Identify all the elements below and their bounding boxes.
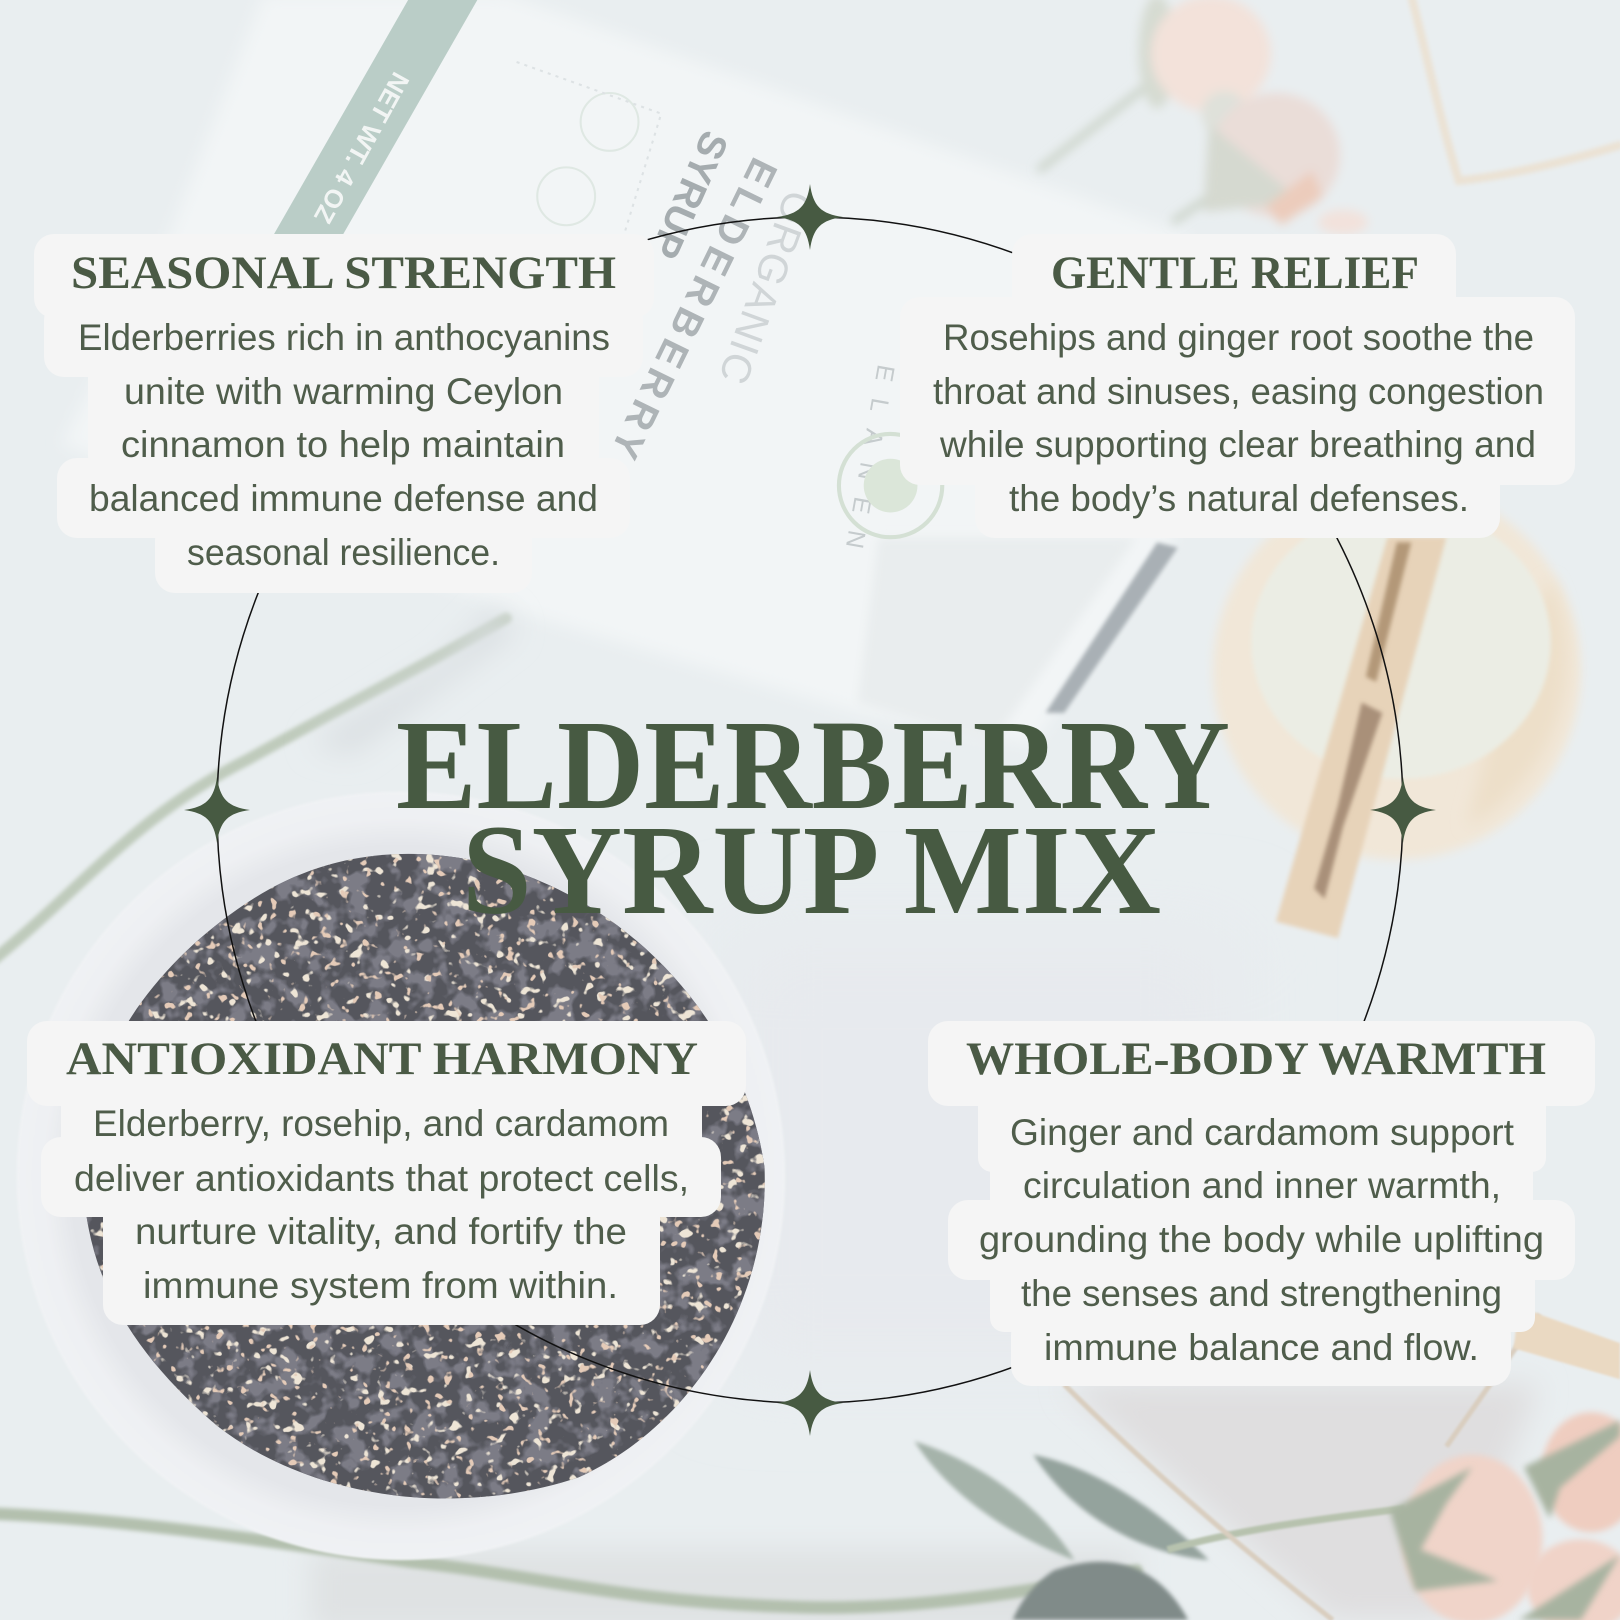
text: whole-body warmth body: immune balance and flow. — [1044, 1327, 1479, 1368]
gold cup and liquid — [1213, 484, 1581, 860]
panel: gentle relief — [900, 234, 1575, 538]
text: gentle relief body: throat and sinuses, easing congestion — [933, 371, 1544, 412]
text: gentle relief body: while supporting clear breathing and — [939, 424, 1536, 465]
star: right — [1370, 777, 1436, 843]
bag — [62, 0, 1188, 754]
connecting circle — [217, 217, 1403, 1403]
main title: ELDERBERRY — [396, 694, 1230, 836]
text: gentle relief body: the body’s natural defenses. — [1009, 478, 1469, 519]
bottom leaves and roses — [914, 1307, 1620, 1620]
panel: whole-body warmth — [928, 1021, 1595, 1386]
text: seasonal strength body: Elderberries rich in anthocyanins — [78, 317, 610, 358]
cinnamon stick — [1276, 537, 1446, 938]
star: bottom — [777, 1370, 843, 1436]
text: seasonal strength body: unite with warming Ceylon — [124, 371, 563, 412]
bag: ELDERBERRY — [602, 151, 786, 466]
text: whole-body warmth body — [979, 1112, 1544, 1368]
top frame gold line — [1411, 0, 1620, 181]
text: seasonal strength body: seasonal resilience. — [187, 532, 500, 573]
main title: SYRUP MIX — [462, 799, 1161, 941]
bag: ELANEN — [840, 363, 899, 550]
star: left — [184, 777, 250, 843]
main title — [396, 694, 1230, 941]
text: seasonal strength body: cinnamon to help maintain — [121, 424, 565, 465]
heading: gentle relief: GENTLE RELIEF — [1051, 247, 1419, 299]
top roses — [1038, 0, 1368, 235]
text: antioxidant harmony body: Elderberry, rosehip, and cardamom — [93, 1103, 669, 1144]
panel: seasonal strength — [34, 234, 654, 593]
bag: ORGANIC — [710, 185, 822, 390]
bag: SYRUP — [642, 124, 737, 265]
text: antioxidant harmony body: deliver antioxidants that protect cells, — [74, 1158, 689, 1199]
text: whole-body warmth body: grounding the body while uplifting — [979, 1219, 1544, 1260]
text: whole-body warmth body: circulation and inner warmth, — [1023, 1165, 1501, 1206]
text: seasonal strength body — [78, 317, 610, 573]
heading: whole-body warmth: WHOLE-BODY WARMTH — [966, 1033, 1546, 1085]
text: antioxidant harmony body: nurture vitality, and fortify the — [135, 1211, 627, 1252]
heading: seasonal strength: SEASONAL STRENGTH — [71, 247, 616, 299]
stems left — [0, 618, 1136, 1608]
text: whole-body warmth body: the senses and strengthening — [1021, 1273, 1502, 1314]
star: top — [777, 184, 843, 250]
bowl — [86, 854, 784, 1562]
panel: antioxidant harmony — [27, 1021, 746, 1325]
text: gentle relief body — [933, 317, 1544, 519]
bag: NET WT. 4 OZ — [308, 67, 414, 228]
text: antioxidant harmony body: immune system from within. — [143, 1265, 618, 1306]
heading: antioxidant harmony: ANTIOXIDANT HARMONY — [66, 1033, 698, 1085]
text: seasonal strength body: balanced immune defense and — [89, 478, 598, 519]
text: gentle relief body: Rosehips and ginger root soothe the — [943, 317, 1534, 358]
text: antioxidant harmony body — [74, 1103, 689, 1306]
text: whole-body warmth body: Ginger and cardamom support — [1010, 1112, 1515, 1153]
